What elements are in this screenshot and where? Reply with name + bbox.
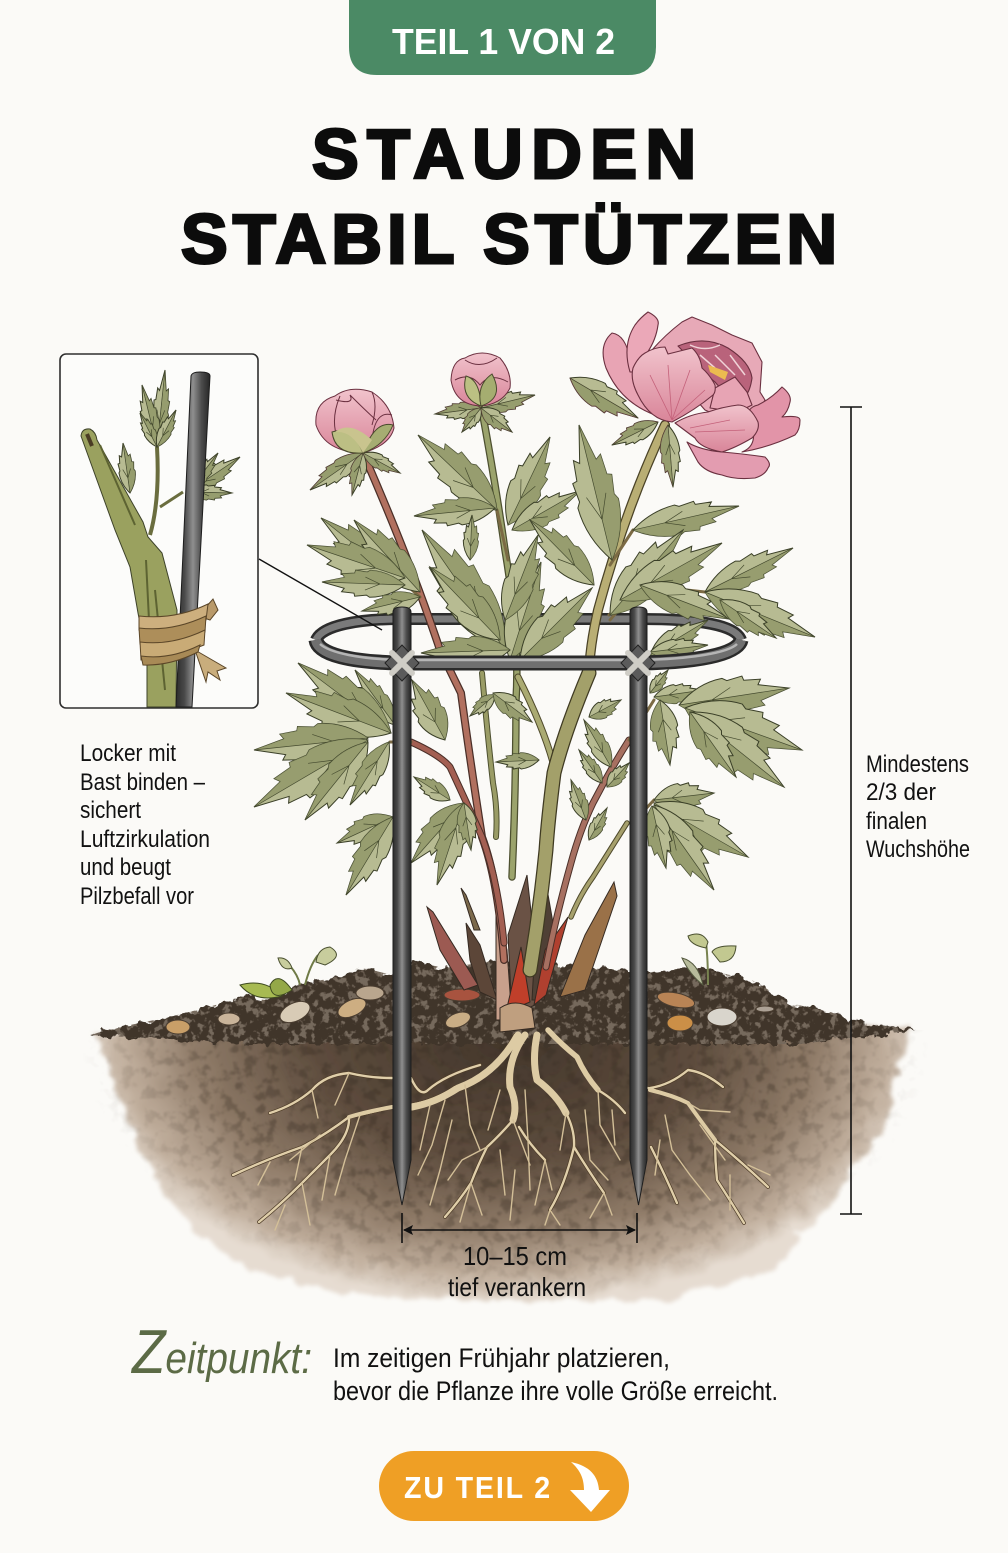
soil cross-section (80, 934, 930, 1310)
bottom petal (687, 442, 769, 479)
callout text: tie loosely: Locker mit (80, 740, 176, 767)
root fill (233, 1030, 768, 1223)
timing script heading: Zeitpunkt: (130, 1318, 312, 1387)
back petals (652, 317, 765, 430)
lower-left leaves (243, 648, 406, 903)
roots (233, 1030, 770, 1230)
inset panel: bast tie detail (60, 354, 258, 708)
height label: 2/3 der (866, 779, 936, 806)
callout text: tie loosely: Bast binden – (80, 769, 206, 796)
next part button: ZU TEIL 2 (404, 1470, 552, 1505)
timing text: Im zeitigen Frühjahr platzieren, (333, 1343, 670, 1373)
plant crown (427, 875, 617, 1032)
depth label (448, 1241, 586, 1302)
height label: Wuchshöhe (866, 836, 970, 863)
icon: curved arrow (570, 1462, 610, 1512)
inset: rod (176, 372, 210, 707)
ring front (316, 640, 741, 663)
timing text (333, 1343, 778, 1406)
lower-right leaves (640, 669, 810, 900)
inset: bast twine (139, 599, 226, 682)
depth label: 10–15 cm (463, 1241, 567, 1271)
centre compound leaf (403, 516, 604, 672)
mid petal (710, 377, 752, 412)
support stake right (630, 607, 647, 1205)
bud centre (434, 353, 537, 438)
front big petal (632, 347, 715, 422)
callout text: tie loosely (80, 740, 210, 910)
title: STAUDEN (312, 115, 696, 193)
callout connector line (259, 559, 382, 630)
bud left (305, 389, 404, 498)
front lower petal (675, 405, 758, 452)
part badge: TEIL 1 VON 2 (392, 21, 615, 62)
tie left (385, 645, 419, 681)
depth dimension arrow (402, 1213, 637, 1243)
support stake left (393, 607, 411, 1205)
right petal (742, 387, 800, 452)
ring back (316, 619, 741, 640)
height label (866, 751, 970, 863)
root outlines (233, 1030, 768, 1223)
rootlets (258, 1073, 770, 1230)
tie right (621, 645, 655, 681)
height label: Mindestens (866, 751, 969, 778)
height label: finalen (866, 808, 927, 835)
seedling left (240, 947, 336, 998)
title (181, 115, 837, 278)
stems (363, 405, 705, 970)
callout text: tie loosely: sichert (80, 797, 141, 824)
callout text: tie loosely: Pilzbefall vor (80, 883, 194, 910)
part badge (349, 0, 656, 75)
callout text: tie loosely: Luftzirkulation (80, 826, 210, 853)
stones (166, 986, 774, 1034)
callout text: tie loosely: und beugt (80, 854, 171, 881)
depth label: tief verankern (448, 1272, 586, 1302)
title: STABIL STÜTZEN (181, 200, 837, 278)
next part button (379, 1451, 629, 1521)
seedling right (682, 934, 736, 985)
inner leaves (399, 666, 706, 889)
inset: shoot (81, 369, 245, 707)
timing text: bevor die Pflanze ihre volle Größe erreicht. (333, 1376, 778, 1406)
foliage (243, 420, 822, 903)
far-right leaves (644, 536, 822, 665)
upper-left compound leaf (302, 504, 432, 621)
upper-right leaves (519, 420, 742, 633)
thick root centres (349, 1030, 715, 1140)
top-centre compound leaf (406, 422, 586, 561)
height bracket (840, 407, 862, 1214)
full peony bloom (563, 312, 800, 488)
